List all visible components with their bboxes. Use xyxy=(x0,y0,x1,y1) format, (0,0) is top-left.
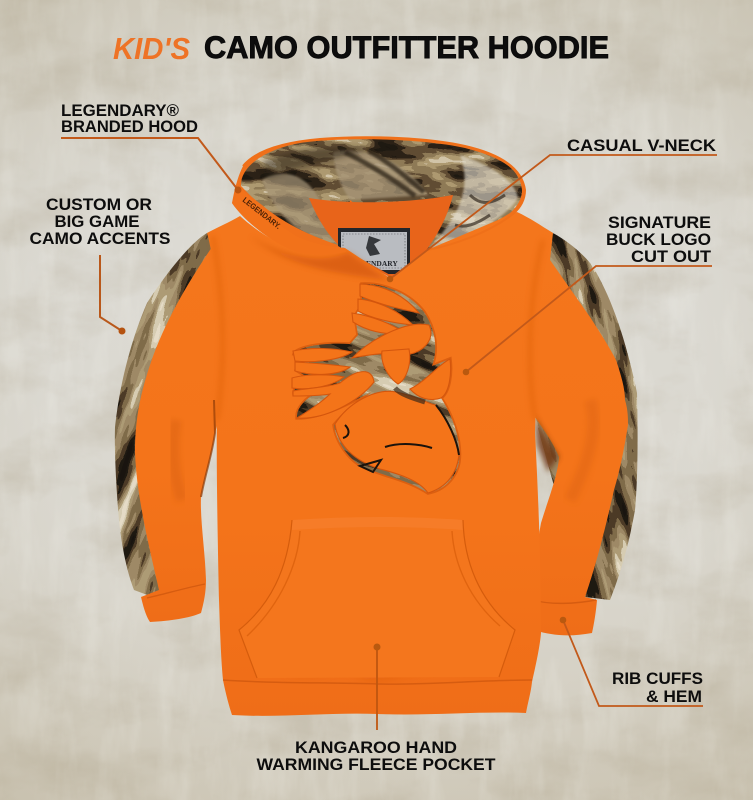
label text: BRANDED HOOD xyxy=(61,117,198,136)
label text: BIG GAME xyxy=(54,212,140,231)
tag logo xyxy=(366,236,381,256)
shoulder and side seams xyxy=(213,236,543,420)
callout: kangaroo pocket xyxy=(256,644,496,774)
leader line xyxy=(563,620,703,706)
hood embroidered brand: LEGENDARY. xyxy=(241,195,283,231)
title main: CAMO OUTFITTER HOODIE: CAMO OUTFITTER HOODIE xyxy=(204,29,609,65)
label text: BUCK LOGO xyxy=(606,230,711,249)
left tan fold xyxy=(262,172,337,244)
leader line xyxy=(100,255,122,331)
label text: CUT OUT xyxy=(631,247,712,266)
left sleeve camo accent xyxy=(114,233,217,595)
label text: CUSTOM OR xyxy=(46,195,152,214)
title accent: KID'S: KID'S xyxy=(113,31,190,66)
logo camo fill xyxy=(294,284,460,492)
label text: LEGENDARY® xyxy=(61,101,179,120)
leader line xyxy=(390,155,717,279)
callout: Legendary branded hood xyxy=(61,101,242,194)
leader line xyxy=(376,647,378,730)
hood left flap with brand text xyxy=(232,188,346,254)
label text: & HEM xyxy=(646,687,702,706)
hood camo lining xyxy=(241,139,522,250)
label text: KANGAROO HAND xyxy=(295,738,457,757)
chest shadow under hood xyxy=(250,236,388,280)
title xyxy=(113,29,609,66)
label text: RIB CUFFS xyxy=(612,669,703,688)
leader line xyxy=(466,266,712,372)
dot xyxy=(387,276,393,282)
kangaroo pocket xyxy=(239,517,515,678)
callout: signature buck logo xyxy=(463,213,712,375)
label text: CASUAL V-NECK xyxy=(567,136,717,155)
inner back collar xyxy=(309,195,453,280)
hem ribbing xyxy=(223,680,532,684)
logo dark accents xyxy=(343,405,459,472)
hoodie illustration xyxy=(114,136,638,716)
tag text: LEGENDARY xyxy=(350,259,398,268)
right sleeve xyxy=(505,215,628,635)
dot xyxy=(560,617,566,623)
left sleeve xyxy=(135,232,245,622)
right pale fold xyxy=(428,155,518,250)
logo stitched halo xyxy=(294,284,460,493)
hood right edge xyxy=(243,137,525,250)
hood outer shell xyxy=(232,137,525,262)
callout: custom camo accents xyxy=(30,195,170,334)
pocket fold shadows xyxy=(290,658,470,676)
logo orange antler and head shapes xyxy=(292,284,459,493)
dot xyxy=(118,328,126,334)
callout: casual v-neck xyxy=(387,136,717,282)
right sleeve camo accent xyxy=(536,233,638,600)
dot xyxy=(463,369,469,375)
upper dark shadow xyxy=(262,147,370,178)
torso xyxy=(207,212,553,716)
central tan fold xyxy=(333,151,428,200)
label text: SIGNATURE xyxy=(608,213,711,232)
label text: CAMO ACCENTS xyxy=(30,229,170,248)
dot xyxy=(374,644,380,650)
dot xyxy=(234,186,242,194)
neck label tag xyxy=(338,228,410,274)
leader line xyxy=(61,138,238,190)
label text: WARMING FLEECE POCKET xyxy=(256,755,496,774)
buck logo cut out xyxy=(292,282,462,495)
callout: rib cuffs and hem xyxy=(560,617,703,706)
